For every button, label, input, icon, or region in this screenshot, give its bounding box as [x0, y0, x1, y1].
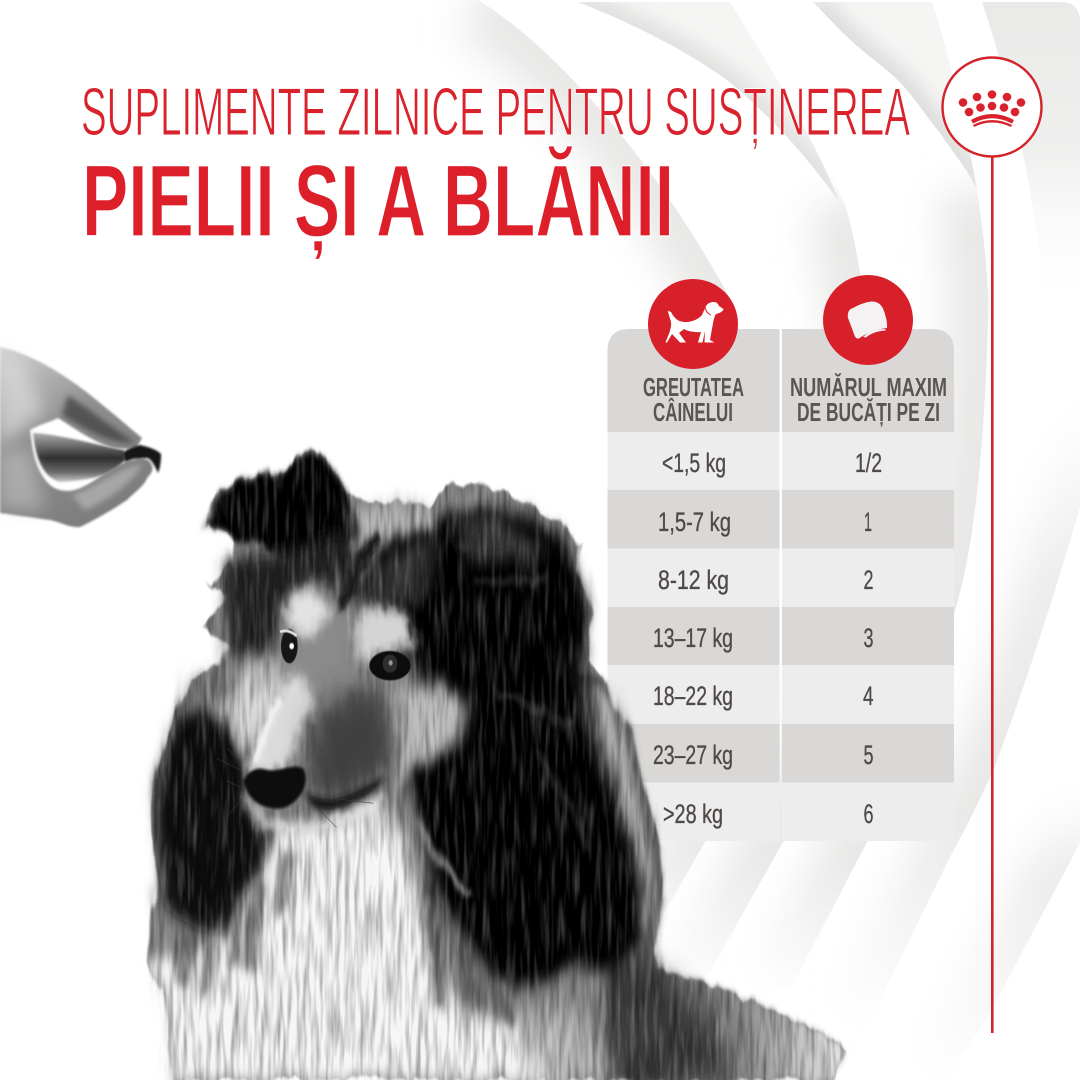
- treat: [123, 445, 161, 473]
- weight values: 18–22 kg: [653, 681, 733, 711]
- palm light: [0, 352, 45, 445]
- header: pieces column: [790, 372, 947, 427]
- photo: shetland sheepdog: [147, 448, 847, 1080]
- title: [81, 74, 910, 260]
- title line 2: PIELII ȘI A BLĂNII: [82, 144, 674, 260]
- furry dog body: [147, 448, 847, 1080]
- weight values: >28 kg: [663, 799, 723, 829]
- table header: [608, 329, 954, 432]
- pieces values: 5: [864, 740, 874, 770]
- weight values: [653, 448, 733, 829]
- pieces values: 2: [864, 565, 874, 595]
- icon: treat in red circle: [823, 275, 913, 365]
- lower chest grey: [507, 1011, 617, 1080]
- fur streaks: grey on mane: [457, 538, 587, 848]
- bottom right dark fur: [607, 962, 740, 1080]
- dog silhouette: [147, 448, 847, 1080]
- white chest: [147, 803, 573, 1080]
- fur streaks: dark into chest: [183, 852, 510, 1024]
- pieces values: 1/2: [855, 448, 882, 478]
- face center mid tone: [280, 583, 370, 722]
- pieces values: 3: [864, 623, 874, 653]
- nose: [243, 767, 306, 809]
- whiskers: [217, 748, 373, 828]
- dog face tones: [242, 536, 418, 834]
- right cheek light: [380, 681, 468, 787]
- header: pieces column: DE BUCĂȚI PE ZI: [797, 397, 940, 427]
- left ear: [205, 450, 358, 571]
- index finger shadow: [62, 395, 135, 443]
- weight values: 13–17 kg: [653, 623, 733, 653]
- left mane dark: [157, 693, 273, 942]
- cheek behind grey: [180, 669, 237, 718]
- hand back finger: [33, 433, 125, 482]
- header: pieces column: NUMĂRUL MAXIM: [790, 372, 947, 402]
- front finger highlight: [72, 464, 142, 510]
- pieces values: 4: [863, 681, 874, 711]
- weight values: 23–27 kg: [653, 740, 733, 770]
- forehead light: [353, 507, 437, 538]
- table: [608, 329, 954, 841]
- muzzle bridge: [245, 669, 315, 777]
- right eye: [369, 651, 411, 680]
- left brow light patch: [282, 585, 328, 640]
- hand palm and front finger: [0, 347, 152, 527]
- pieces values: [855, 448, 882, 829]
- weight values: 8-12 kg: [658, 565, 729, 595]
- lower lip white rim: [242, 791, 385, 834]
- forehead dark cleft: [342, 536, 377, 607]
- left cheek light: [220, 656, 283, 754]
- icon: crown: [959, 90, 1025, 127]
- background ribbons: [478, 0, 1080, 1080]
- left face fur: [223, 534, 360, 656]
- pieces values: 1: [864, 507, 872, 537]
- header: weight column: [643, 372, 744, 427]
- main black mane: [353, 509, 643, 987]
- right brow light patch: [353, 605, 418, 662]
- pieces values: 6: [864, 799, 874, 829]
- weight values: 1,5-7 kg: [658, 507, 731, 537]
- photo: hand holding treat: [0, 347, 161, 527]
- mouth: [303, 776, 385, 810]
- header: weight column: GREUTATEA: [643, 372, 744, 402]
- logo: crown in circle with vertical line: [942, 58, 1042, 1033]
- forehead upper grey: [337, 538, 380, 616]
- right ear highlight: [450, 513, 550, 562]
- header: weight column: CÂINELUI: [653, 397, 733, 427]
- icon: dog in red circle: [648, 279, 738, 369]
- weight values: <1,5 kg: [662, 448, 726, 478]
- table rows: [608, 432, 954, 841]
- right body and tail: [573, 669, 847, 1080]
- muzzle side dark: [307, 685, 398, 803]
- left eye: [280, 629, 298, 663]
- right body grey band: [583, 685, 652, 946]
